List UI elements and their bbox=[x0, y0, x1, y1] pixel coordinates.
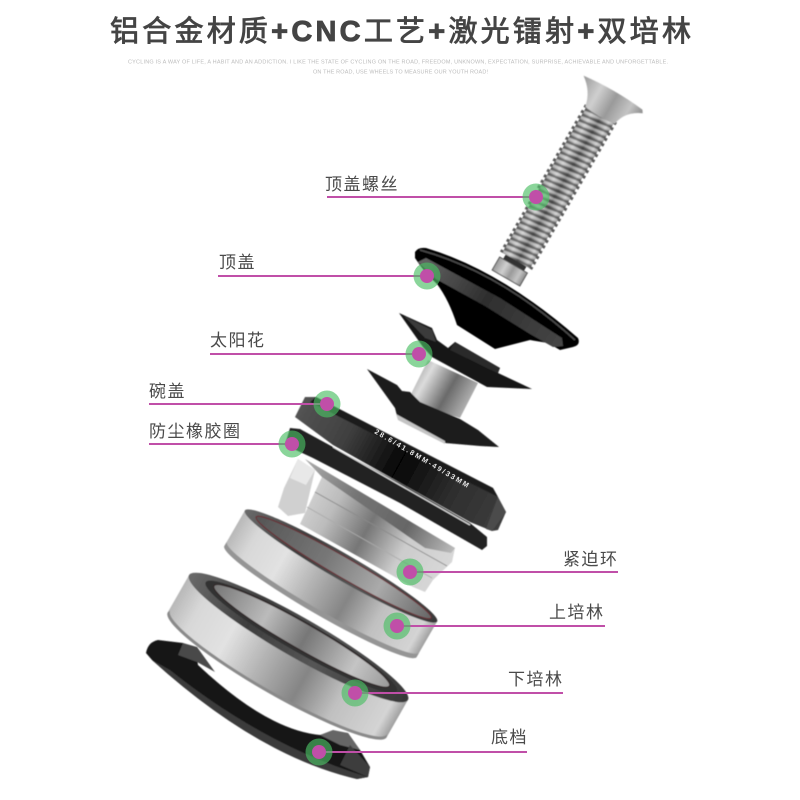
callout: upper bearing bbox=[384, 603, 605, 640]
subtitle text bbox=[128, 60, 668, 76]
bowl cap size marking: 28.6/41.8MM-49/33MM bbox=[373, 427, 471, 490]
part: bowl cap bbox=[295, 397, 506, 531]
part: top cap bbox=[415, 248, 579, 350]
part: bottom spacer bbox=[146, 640, 370, 779]
callout: dust seal bbox=[149, 422, 306, 458]
callout: bowl cap bbox=[149, 382, 340, 418]
callout: top cap bbox=[218, 253, 440, 290]
part: star nut bbox=[367, 313, 532, 447]
subtitle text: ON THE ROAD, USE WHEELS TO MEASURE OUR YOUTH ROAD! bbox=[313, 70, 488, 76]
part: upper bearing bbox=[218, 499, 444, 668]
label: 太阳花 bbox=[210, 331, 266, 350]
label: 下培林 bbox=[508, 670, 564, 689]
callout: compression ring bbox=[396, 550, 618, 586]
title: 铝合金材质+CNC工艺+激光镭射+双培林 bbox=[110, 15, 691, 48]
callout: top cap screw bbox=[325, 175, 550, 210]
part: top cap screw bbox=[477, 74, 645, 296]
callout: lower bearing bbox=[342, 670, 564, 706]
label: 碗盖 bbox=[149, 382, 186, 401]
part: compression ring bbox=[278, 459, 455, 592]
label: 顶盖螺丝 bbox=[325, 175, 399, 194]
label: 防尘橡胶圈 bbox=[149, 422, 242, 441]
label: 上培林 bbox=[549, 603, 604, 622]
subtitle text: CYCLING IS A WAY OF LIFE, A HABIT AND AN ADDICTION. I LIKE THE STATE OF CYCLING ON THE ROAD, FREEDOM, UNKNOWN, EXPECTATION, SURPRISE, ACHIEVABLE AND UNFORGETTABLE. bbox=[128, 60, 668, 66]
label: 顶盖 bbox=[219, 253, 256, 272]
callout: star nut bbox=[210, 331, 432, 368]
label: 底档 bbox=[491, 728, 528, 747]
part: lower bearing bbox=[158, 558, 418, 755]
part: dust seal bbox=[285, 428, 487, 550]
exploded headset parts bbox=[146, 74, 645, 779]
label: 紧迫环 bbox=[563, 550, 618, 569]
callout: bottom spacer bbox=[306, 728, 528, 766]
